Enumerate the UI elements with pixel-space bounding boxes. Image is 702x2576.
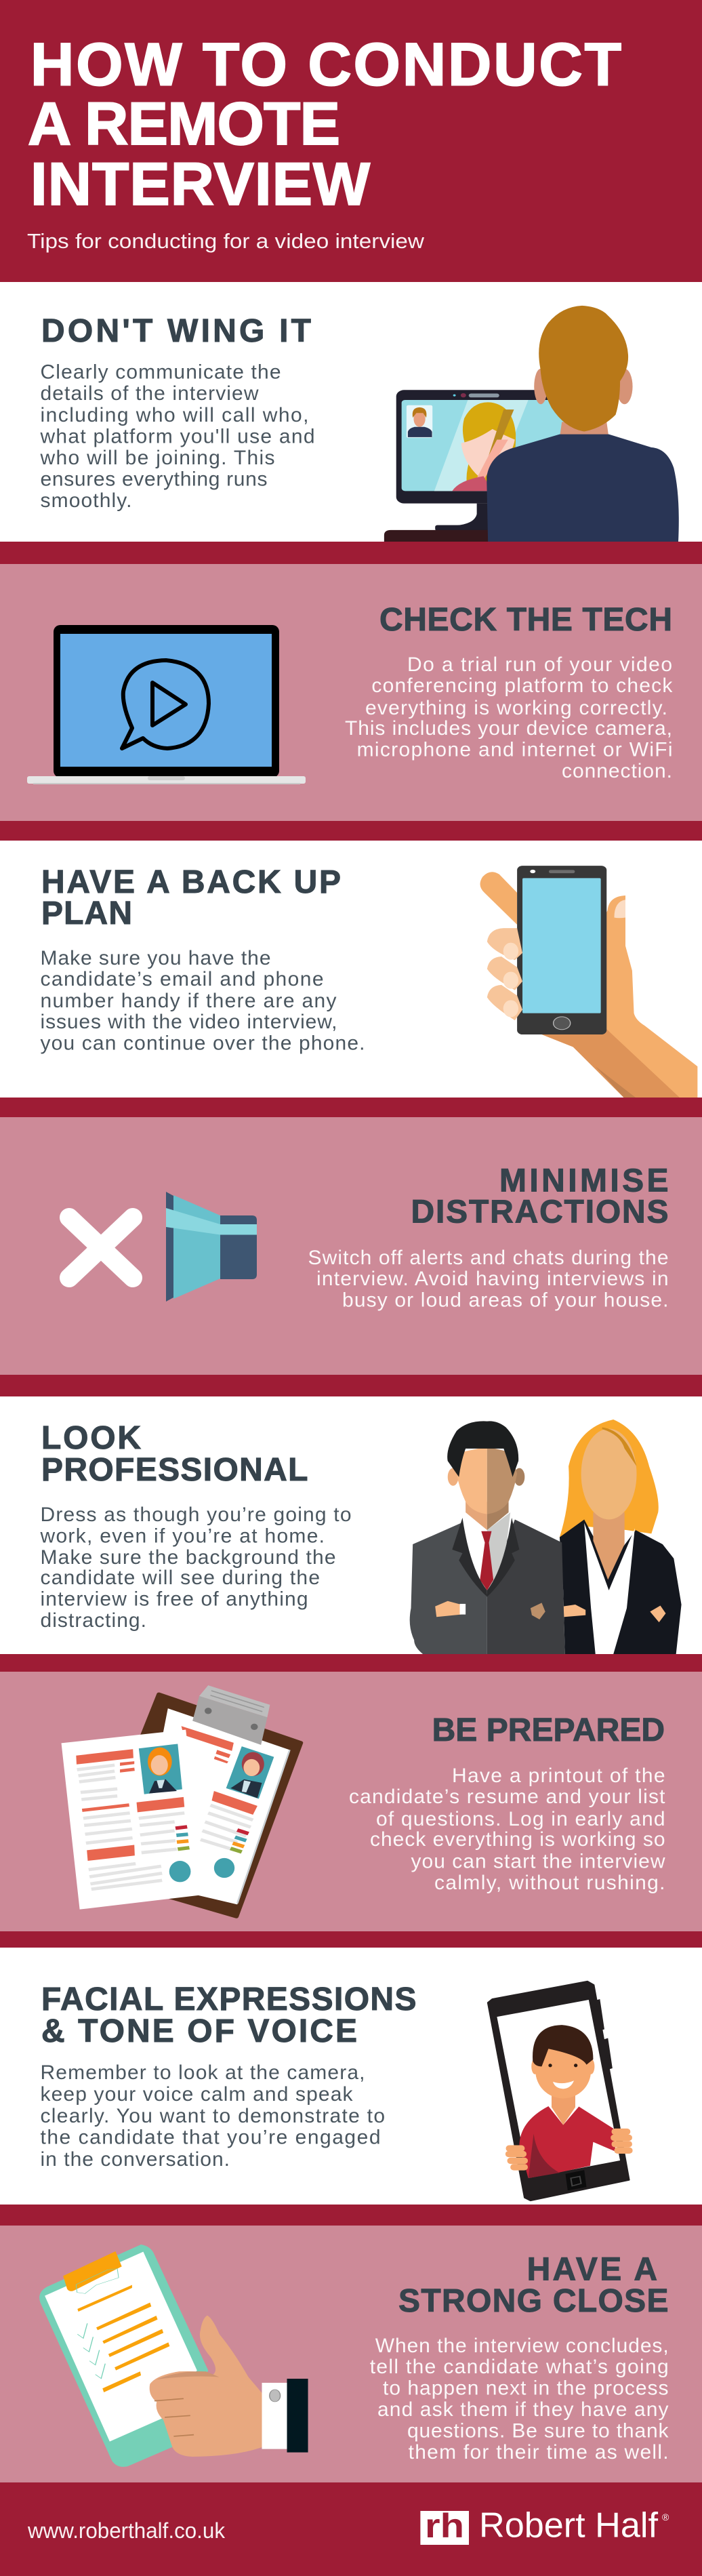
heading: have a strong close	[398, 2251, 668, 2319]
heading: have a strong close: STRONG CLOSE	[398, 2283, 668, 2319]
text block: have a back up plan: Make sure you have the	[41, 947, 271, 969]
text block: facial expressions and tone of voice: Remember to look at the camera,	[41, 2061, 365, 2084]
text block: minimise distractions: Switch off alerts and chats during the	[308, 1247, 668, 1269]
text block: be prepared: calmly, without rushing.	[434, 1872, 665, 1894]
heading: facial expressions and tone of voice: FACIAL EXPRESSIONS	[41, 1981, 416, 2017]
text block: have a back up plan: number handy if there are any	[41, 990, 336, 1012]
text block: be prepared: you can start the interview	[411, 1851, 665, 1872]
text block: check the tech: Do a trial run of your video	[407, 653, 672, 676]
text block: have a strong close: tell the candidate what’s going	[370, 2356, 669, 2378]
text block: have a strong close: questions. Be sure to thank	[407, 2420, 669, 2442]
subtitle: Tips for conducting for a video interview	[27, 229, 425, 253]
heading: check the tech: CHECK THE TECH	[379, 602, 672, 638]
text block: look professional: candidate will see during the	[41, 1567, 320, 1589]
heading: minimise distractions	[411, 1163, 668, 1230]
text block: check the tech: microphone and internet or WiFi	[357, 739, 673, 761]
heading: minimise distractions: MINIMISE	[499, 1163, 668, 1199]
text block: facial expressions and tone of voice	[41, 2061, 385, 2171]
text block: have a back up plan: issues with the video interview,	[41, 1011, 337, 1033]
text block: look professional: work, even if you’re at home.	[39, 1525, 325, 1547]
heading: be prepared: BE PREPARED	[432, 1712, 665, 1748]
text block: have a back up plan: candidate’s email and phone	[41, 968, 324, 990]
text block: look professional: Make sure the background the	[41, 1546, 336, 1569]
panel: footer	[0, 2482, 702, 2576]
title	[28, 30, 621, 218]
title: INTERVIEW	[30, 150, 370, 218]
text block: facial expressions and tone of voice: keep your voice calm and speak	[41, 2083, 354, 2106]
heading: have a strong close: HAVE A	[527, 2251, 657, 2287]
text block: look professional	[39, 1504, 351, 1632]
icon: white cross	[69, 1217, 133, 1278]
text block: facial expressions and tone of voice: clearly. You want to demonstrate to	[41, 2105, 385, 2127]
text block: have a strong close: to happen next in the process	[383, 2377, 668, 2400]
heading: have a back up plan: HAVE A BACK UP	[41, 864, 341, 900]
logo: Robert Half: Robert Half	[479, 2506, 659, 2545]
panel: don't wing it	[0, 282, 702, 542]
text block: facial expressions and tone of voice: in the conversation.	[41, 2148, 230, 2171]
text block: check the tech	[345, 653, 673, 782]
text block: facial expressions and tone of voice: the candidate that you’re engaged	[41, 2126, 381, 2149]
panel: look professional	[0, 1396, 702, 1654]
title: A REMOTE	[28, 89, 340, 157]
text block: have a strong close: When the interview concludes,	[375, 2335, 669, 2357]
text block: don't wing it: who will be joining. This	[39, 447, 275, 469]
heading: look professional: PROFESSIONAL	[41, 1452, 308, 1488]
text block: be prepared: check everything is working so	[370, 1828, 665, 1851]
icon: clipboard with two resumes	[62, 1685, 301, 1916]
text block: have a back up plan: you can continue over the phone.	[41, 1032, 365, 1055]
panel: have a strong close	[0, 2226, 702, 2482]
panel: be prepared	[0, 1672, 702, 1931]
heading: facial expressions and tone of voice	[41, 1981, 416, 2049]
text block: don't wing it: including who will call who,	[41, 404, 309, 426]
text block: look professional: distracting.	[41, 1609, 146, 1632]
panel: page header	[0, 0, 702, 282]
text block: check the tech: connection.	[562, 760, 672, 782]
text block: check the tech: conferencing platform to check	[371, 675, 673, 697]
text block: have a strong close	[370, 2335, 669, 2463]
heading: have a back up plan: PLAN	[41, 895, 132, 931]
text block: have a strong close: them for their time as well.	[409, 2441, 669, 2463]
text block: don't wing it: what platform you'll use and	[39, 426, 314, 448]
icon: thumbs up with checklist clipboard	[39, 2245, 308, 2467]
icon: person at a monitor on a video call	[384, 306, 679, 542]
text block: be prepared: Have a printout of the	[452, 1765, 665, 1787]
text block: have a strong close: and ask them if they have any	[377, 2398, 668, 2421]
website address: www.roberthalf.co.uk	[27, 2518, 226, 2543]
text block: don't wing it: Clearly communicate the	[41, 361, 281, 384]
text block: be prepared: candidate’s resume and your list	[349, 1786, 665, 1808]
text block: look professional: interview is free of anything	[41, 1588, 308, 1611]
icon: businesswoman with crossed arms	[560, 1420, 682, 1654]
panel: check the tech	[0, 564, 702, 821]
icon: businessman with crossed arms	[410, 1421, 565, 1654]
text block: don't wing it	[39, 361, 314, 512]
text block: don't wing it: ensures everything runs	[41, 468, 267, 491]
text block: don't wing it: smoothly.	[41, 489, 131, 512]
text block: minimise distractions: busy or loud areas of your house.	[342, 1289, 668, 1312]
icon: muted speaker	[166, 1192, 257, 1302]
text block: be prepared	[349, 1765, 665, 1894]
icon: hand holding a smartphone	[480, 866, 697, 1098]
text block: don't wing it: details of the interview	[41, 382, 259, 405]
heading: don't wing it: DON'T WING IT	[41, 313, 311, 349]
panel: minimise distractions	[0, 1117, 702, 1375]
text block: check the tech: everything is working correctly.	[365, 697, 667, 719]
logo: Robert Half: ®	[662, 2512, 669, 2522]
text block: minimise distractions: interview. Avoid having interviews in	[316, 1268, 668, 1290]
icon: laptop with play button speech bubble	[27, 625, 306, 784]
heading: have a back up plan	[41, 864, 341, 931]
text block: check the tech: This includes your device camera,	[345, 717, 672, 740]
text block: look professional: Dress as though you’re going to	[41, 1504, 351, 1526]
heading: minimise distractions: DISTRACTIONS	[411, 1194, 668, 1230]
icon: smiling person in a smartphone	[488, 1981, 633, 2200]
heading: look professional	[41, 1420, 308, 1488]
heading: look professional: LOOK	[41, 1420, 141, 1456]
text block: be prepared: of questions. Log in early and	[376, 1808, 665, 1830]
text block: have a back up plan	[41, 947, 365, 1055]
heading: facial expressions and tone of voice: & TONE OF VOICE	[41, 2013, 357, 2049]
panel: have a back up plan	[0, 841, 702, 1098]
title: HOW TO CONDUCT	[30, 30, 621, 98]
text block: minimise distractions	[308, 1247, 668, 1312]
panel: facial expressions and tone of voice	[0, 1948, 702, 2205]
logo: Robert Half: rh	[425, 2507, 464, 2545]
